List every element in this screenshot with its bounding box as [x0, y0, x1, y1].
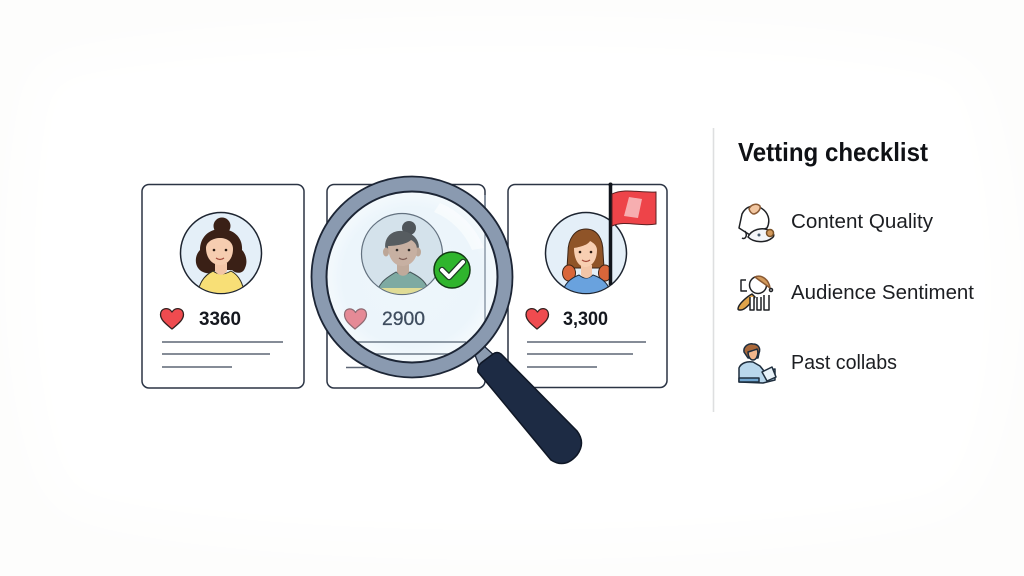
label: content quality: Content Quality [791, 211, 933, 233]
heading: Vetting checklist [738, 137, 928, 167]
label: past collabs: Past collabs [791, 352, 897, 374]
icon: content quality [739, 204, 774, 242]
heart icon [160, 309, 184, 329]
label: audience sentiment: Audience Sentiment [791, 282, 974, 304]
heart icon [344, 309, 366, 329]
avatar: woman with bun and yellow top [180, 212, 262, 296]
handle [475, 346, 582, 464]
lens glare [434, 203, 484, 250]
right card edge seen through lens [355, 195, 485, 354]
text lines [162, 342, 283, 367]
avatar: woman with brown hair and blue top [546, 212, 626, 296]
avatar: person with bun, dimmed by lens [362, 214, 442, 296]
text lines [527, 342, 646, 367]
red flag [608, 182, 656, 285]
like count: 3,300 [563, 309, 608, 330]
green check badge [434, 252, 470, 288]
magnifying glass [312, 176, 582, 464]
icon: past collabs [739, 344, 776, 383]
card 1: creator profile [142, 184, 304, 388]
text line below lens [346, 366, 368, 368]
metal ring [319, 184, 505, 370]
panel: vetting checklist [714, 128, 974, 412]
card 2: creator under review [327, 184, 485, 388]
lens glass [325, 190, 499, 364]
like count: 3360 [199, 309, 241, 330]
like count: 2900 [382, 309, 425, 330]
card 3: flagged creator profile [508, 182, 667, 388]
icon: audience sentiment [738, 276, 772, 310]
heart icon [526, 309, 548, 329]
